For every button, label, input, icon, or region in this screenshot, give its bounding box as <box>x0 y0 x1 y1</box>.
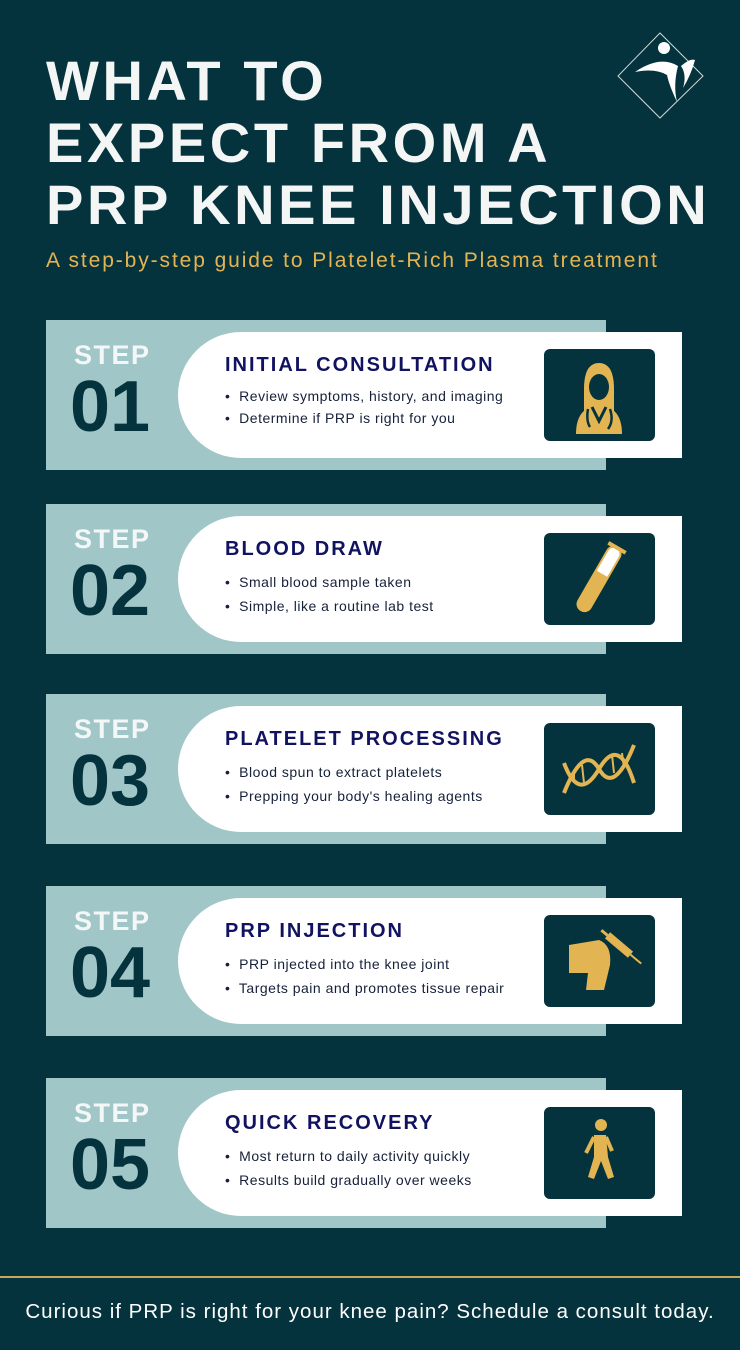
panel: step 1 <box>46 320 682 470</box>
panel: step 2: • Small blood sample taken <box>225 574 412 590</box>
icon: test tube <box>544 533 655 625</box>
panel: step 3 <box>46 694 682 844</box>
panel: step 2: STEP <box>74 524 151 554</box>
title: WHAT TO <box>46 49 327 112</box>
logo <box>617 32 704 119</box>
panel: step 4: 04 <box>70 933 150 1013</box>
panel: step 4: • Targets pain and promotes tissue repair <box>225 980 504 996</box>
panel: step 1: STEP <box>74 340 151 370</box>
panel: step 4 <box>46 886 682 1036</box>
footer text: Curious if PRP is right for your knee pain? Schedule a consult today. <box>25 1300 715 1323</box>
panel: step 5 <box>46 1078 682 1228</box>
panel: step 5: • Results build gradually over weeks <box>225 1172 472 1188</box>
icon: doctor <box>544 349 655 441</box>
panel: step 1: • Review symptoms, history, and imaging <box>225 388 503 404</box>
panel: step 5: 05 <box>70 1125 150 1205</box>
subtitle: A step-by-step guide to Platelet-Rich Plasma treatment <box>46 249 659 272</box>
panel: step 3: PLATELET PROCESSING <box>225 728 504 750</box>
panel: step 3: • Blood spun to extract platelets <box>225 764 442 780</box>
panel: step 5: QUICK RECOVERY <box>225 1112 435 1134</box>
title: PRP KNEE INJECTION <box>46 173 710 236</box>
icon: DNA <box>544 723 655 815</box>
panel: step 4: STEP <box>74 906 151 936</box>
panel: step 1: • Determine if PRP is right for you <box>225 410 455 426</box>
panel: step 1: INITIAL CONSULTATION <box>225 354 495 376</box>
panel: step 3: • Prepping your body's healing agents <box>225 788 483 804</box>
icon: walking person <box>544 1107 655 1199</box>
panel: step 2 <box>46 504 682 654</box>
panel: step 2: 02 <box>70 551 150 631</box>
title <box>46 49 710 236</box>
title: EXPECT FROM A <box>46 111 551 174</box>
panel: step 5: STEP <box>74 1098 151 1128</box>
panel: step 1: 01 <box>70 367 150 447</box>
panel: step 4: PRP INJECTION <box>225 920 404 942</box>
icon: knee syringe <box>544 915 655 1007</box>
panel: step 3: STEP <box>74 714 151 744</box>
panel: step 3: 03 <box>70 741 150 821</box>
panel: step 4: • PRP injected into the knee joint <box>225 956 450 972</box>
panel: step 2: • Simple, like a routine lab test <box>225 598 434 614</box>
panel: step 2: BLOOD DRAW <box>225 538 384 560</box>
panel: step 5: • Most return to daily activity quickly <box>225 1148 470 1164</box>
